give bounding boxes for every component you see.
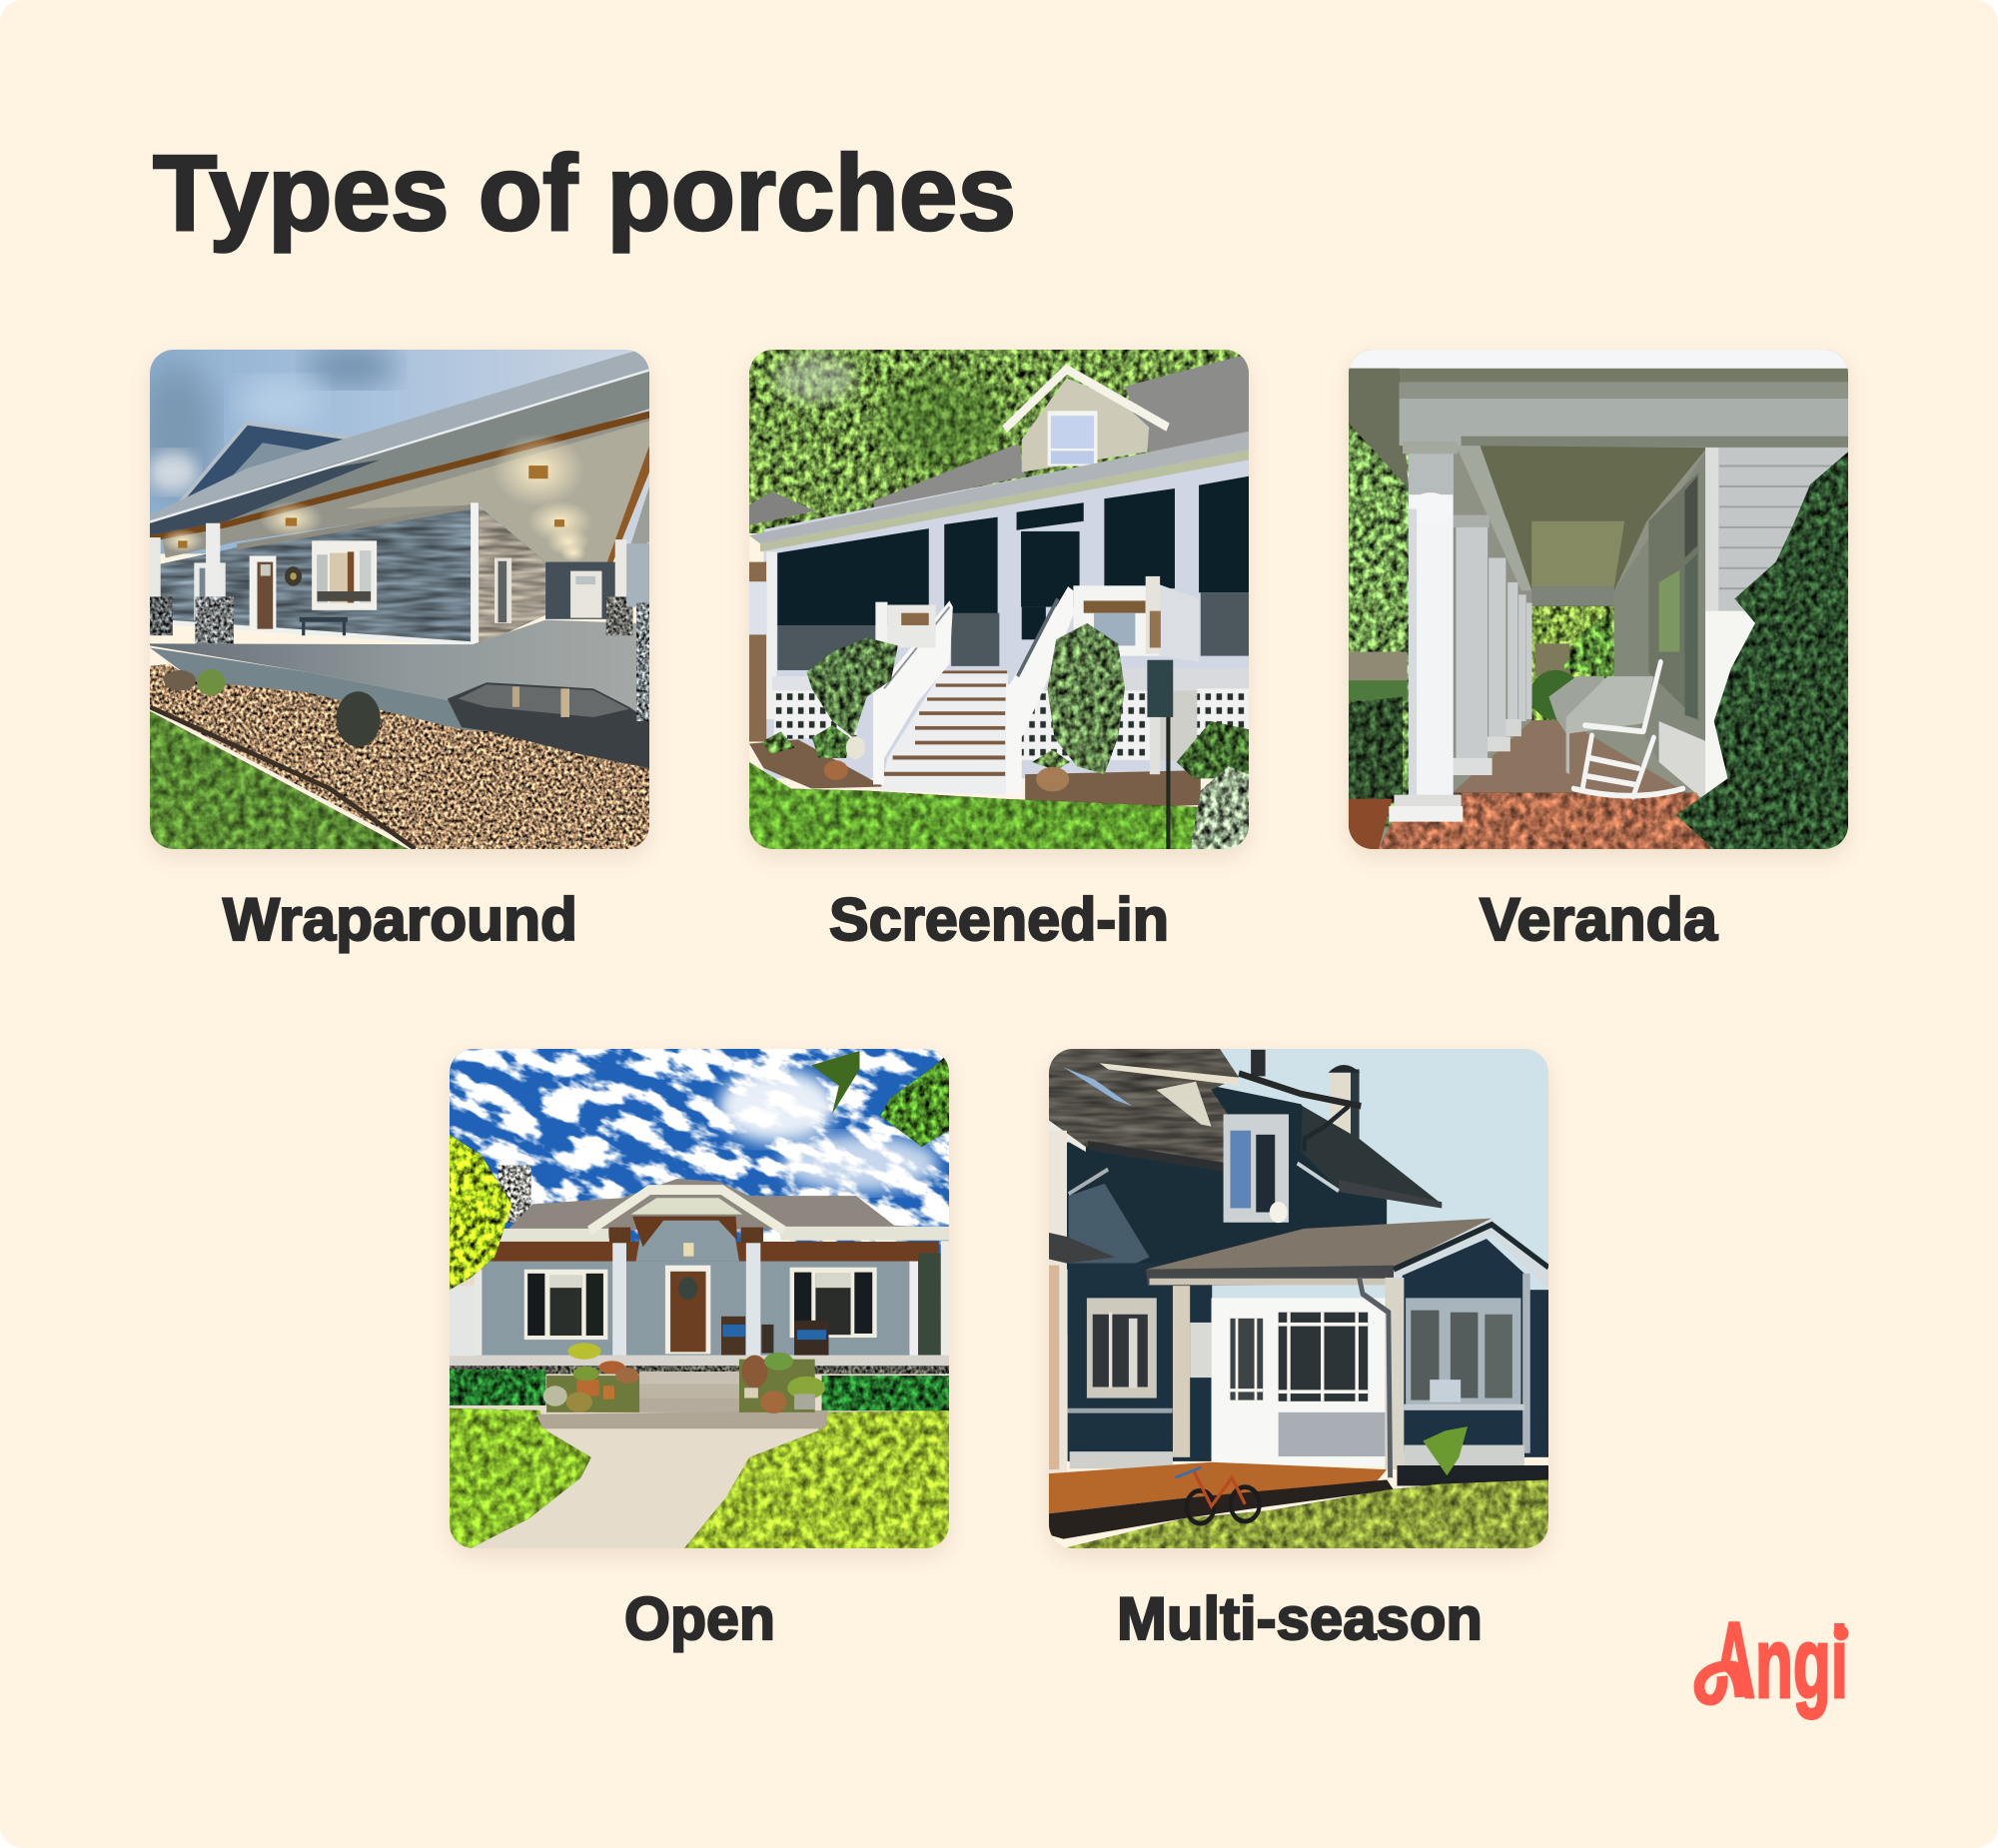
gravel bed	[150, 664, 649, 849]
logo i dot	[1834, 1626, 1848, 1640]
upper roof	[1049, 1049, 1267, 1179]
title: Types of porches	[153, 132, 1016, 253]
gutter	[1069, 1170, 1108, 1194]
stair rails	[873, 586, 1073, 795]
sunroom	[1190, 1278, 1404, 1477]
chimneys	[1251, 1050, 1360, 1141]
top band	[1349, 350, 1848, 370]
panel: open porch	[446, 1049, 953, 1653]
porch wall	[480, 1221, 911, 1356]
columns	[475, 1228, 949, 1358]
lower left window	[1087, 1298, 1157, 1398]
side wall	[479, 505, 545, 645]
fascia	[495, 1227, 949, 1242]
soffit	[489, 1242, 939, 1262]
left corner	[1049, 1131, 1115, 1473]
door	[665, 1266, 710, 1354]
corridor end	[545, 562, 617, 619]
hedges	[450, 1370, 949, 1410]
middle roof	[1146, 1219, 1492, 1286]
far columns	[1487, 558, 1532, 751]
brick floor	[1349, 720, 1710, 849]
ceiling lights	[161, 434, 592, 562]
sky	[137, 346, 649, 553]
soffit	[1349, 369, 1848, 488]
lawn and path	[450, 1408, 949, 1548]
roof	[450, 1179, 949, 1231]
porch deck	[450, 1356, 949, 1374]
upper house shaded siding	[1069, 1184, 1150, 1264]
porch wall and fascia	[749, 432, 1249, 778]
label: multi-season: Multi-season	[1117, 1585, 1483, 1652]
lower left wall	[1068, 1264, 1212, 1468]
roofs	[749, 354, 1249, 525]
second column	[1453, 515, 1493, 775]
photo: open porch	[450, 1049, 949, 1548]
top right leaves	[811, 1051, 949, 1147]
dark railings	[777, 592, 1249, 670]
main column	[1389, 442, 1463, 822]
siding wall	[1705, 448, 1848, 803]
panel: multi-season porch	[1045, 1049, 1552, 1652]
windows	[524, 1268, 877, 1340]
panel: wraparound porch	[146, 350, 653, 954]
upper white railings	[875, 576, 1199, 662]
bush foreground	[1190, 766, 1249, 849]
base	[1349, 350, 1848, 849]
trees	[749, 350, 1249, 533]
porch furniture	[721, 1317, 828, 1358]
left tree	[450, 1135, 512, 1290]
left side	[450, 1286, 475, 1356]
shrubs	[164, 669, 381, 747]
panel: veranda	[1345, 350, 1852, 953]
label: veranda: Veranda	[1480, 886, 1718, 953]
base	[450, 1049, 949, 1548]
upper house wall	[1067, 1086, 1387, 1270]
brick wall	[749, 551, 777, 741]
mailbox	[1147, 660, 1173, 849]
label: open: Open	[624, 1585, 775, 1652]
beam	[1400, 383, 1848, 447]
mulch	[749, 739, 1201, 809]
lattice	[772, 668, 1249, 760]
panel: screened-in porch	[745, 350, 1253, 953]
chimney	[499, 1166, 531, 1223]
potted plants	[543, 1343, 825, 1413]
garden distance	[1529, 606, 1614, 720]
logo flourish	[1699, 1666, 1740, 1700]
grass	[749, 762, 1249, 849]
porch posts	[150, 523, 649, 721]
photo: wraparound porch	[150, 350, 649, 849]
gable	[589, 1190, 784, 1257]
photo: screened-in porch	[749, 350, 1249, 849]
upper window	[1224, 1114, 1289, 1223]
main roof and soffit	[150, 351, 649, 535]
dormer	[1005, 370, 1168, 472]
garden left	[1349, 420, 1411, 827]
bicycle	[1175, 1467, 1260, 1523]
sky	[1049, 1049, 1548, 1335]
grass	[150, 707, 416, 849]
rocking chairs	[1548, 662, 1683, 797]
gable roof	[180, 423, 359, 502]
logo: Angi	[1694, 1618, 1848, 1720]
dark screens	[777, 476, 1249, 625]
right house	[918, 1253, 941, 1356]
sky with clouds	[340, 832, 1080, 1395]
deck	[1049, 1462, 1548, 1539]
photo: veranda	[1349, 350, 1848, 849]
ceiling	[150, 411, 649, 564]
stairs	[881, 670, 1008, 795]
grass	[1063, 1479, 1548, 1548]
right window	[1404, 1298, 1524, 1465]
label: screened-in: Screened-in	[829, 886, 1169, 953]
right gable	[1394, 1219, 1548, 1457]
pots	[824, 736, 1069, 791]
upper right roof	[1239, 1074, 1442, 1208]
plant	[1423, 1426, 1468, 1475]
door and windows	[194, 540, 377, 630]
label: wraparound: Wraparound	[223, 886, 577, 953]
evergreen bush	[1676, 452, 1848, 849]
windows wall	[1614, 450, 1707, 803]
steps	[536, 1372, 828, 1428]
shrubs	[762, 623, 1249, 778]
bench	[300, 617, 348, 635]
floor slab	[150, 620, 649, 768]
photo: multi-season porch	[1049, 1049, 1548, 1548]
main wall	[160, 502, 479, 646]
ceiling	[1456, 446, 1707, 606]
